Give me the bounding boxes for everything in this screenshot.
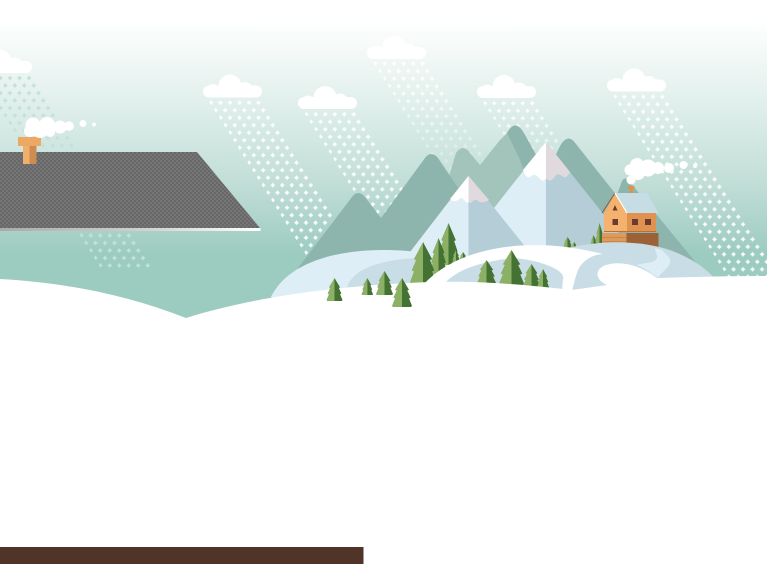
- trees behind the left hill: [410, 223, 467, 284]
- house chimney: [628, 186, 634, 193]
- chimney: [18, 137, 41, 164]
- house: [602, 158, 697, 249]
- bottom brown bar: [0, 547, 364, 564]
- trees on the front snow: [326, 271, 412, 307]
- snowfall bands: [0, 61, 767, 297]
- snowy mountain, right: [457, 142, 636, 255]
- trees on the middle hill: [477, 250, 549, 288]
- frozen lake: [445, 258, 563, 290]
- chimney smoke: [24, 117, 96, 138]
- front snow field: [0, 276, 767, 564]
- sky background: [0, 0, 767, 340]
- white middle hill: [425, 245, 603, 296]
- white drift on hill: [597, 263, 658, 290]
- trees behind the right hill: [563, 223, 604, 249]
- snowy mountain, left: [400, 176, 544, 270]
- winding stream: [637, 248, 670, 278]
- roof in foreground: [0, 117, 260, 231]
- blue right hill: [560, 242, 716, 292]
- background mountains: [298, 126, 702, 290]
- pale blue left hill: [270, 250, 440, 300]
- house smoke: [624, 158, 697, 184]
- clouds: [0, 36, 666, 109]
